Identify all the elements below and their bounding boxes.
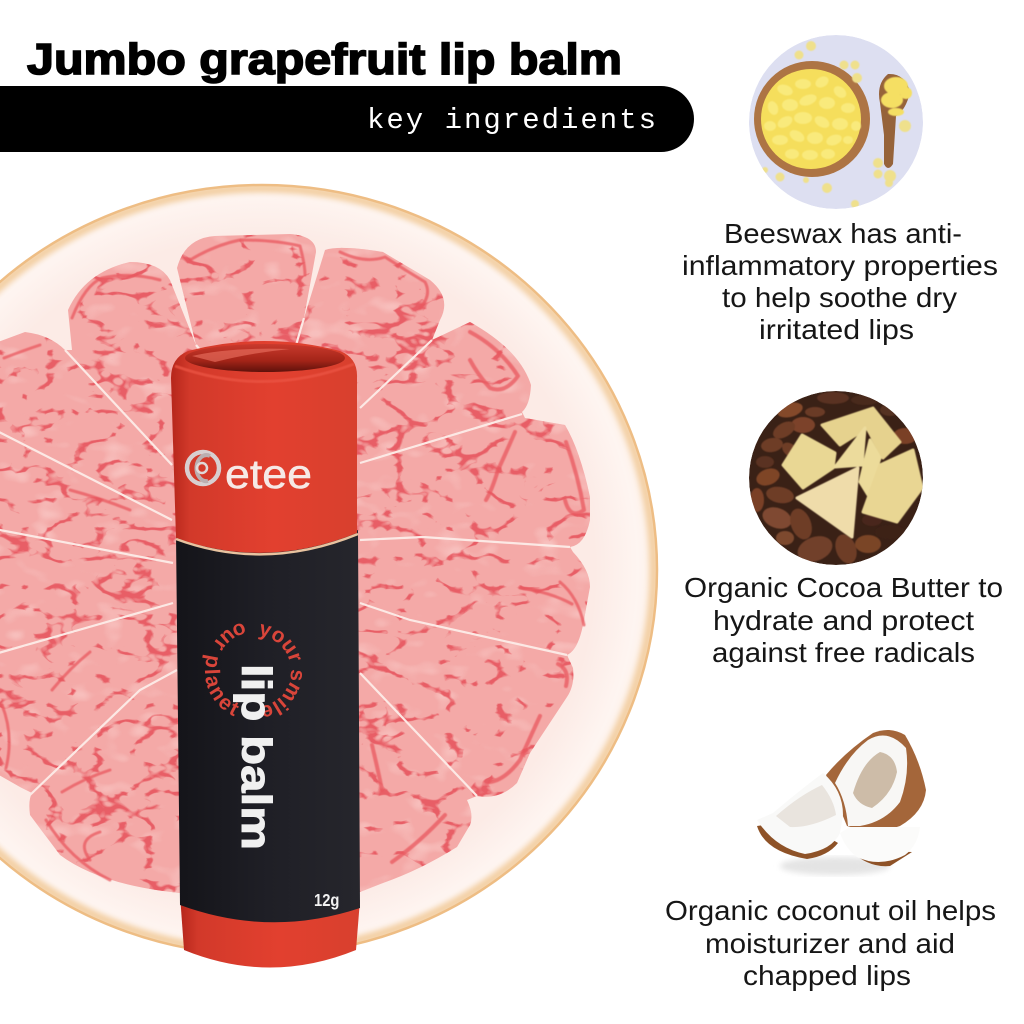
circular slogan bbox=[202, 624, 302, 717]
ingredient text: cocoa butter: against free radicals bbox=[712, 637, 975, 668]
logo mark bbox=[187, 452, 219, 484]
logo wordmark: etee bbox=[225, 451, 312, 497]
ingredient: coconut bbox=[757, 730, 926, 875]
ground shadow bbox=[780, 857, 890, 875]
left coconut wedge bbox=[757, 773, 843, 859]
our planet: our planet bbox=[202, 624, 245, 716]
bottom coconut piece bbox=[840, 827, 920, 866]
tube black body bbox=[176, 530, 360, 922]
wax flakes bbox=[761, 69, 861, 169]
grapefruit rind bbox=[0, 185, 657, 955]
ingredient text: beeswax: Beeswax has anti- bbox=[724, 218, 962, 249]
your smile: your smile bbox=[258, 624, 302, 717]
ingredient text: coconut: chapped lips bbox=[743, 960, 911, 991]
ingredient text: coconut: moisturizer and aid bbox=[705, 928, 955, 959]
red pulp vesicle streaks bbox=[2, 240, 584, 880]
wooden bowl bbox=[754, 61, 870, 177]
lid seam bbox=[176, 534, 358, 554]
right coconut half bbox=[826, 730, 926, 830]
ingredient text: beeswax: irritated lips bbox=[759, 314, 914, 345]
grapefruit pulp segments bbox=[0, 234, 590, 893]
weight: 12g bbox=[314, 891, 339, 910]
wooden spoon bbox=[879, 74, 910, 168]
segment membranes bbox=[0, 318, 570, 796]
black bar bbox=[0, 86, 694, 152]
subtitle banner bbox=[0, 86, 694, 152]
lip balm tube bbox=[171, 341, 360, 968]
cocoa beans bbox=[750, 392, 917, 567]
etee logo bbox=[187, 451, 312, 497]
spoon flakes bbox=[881, 77, 912, 116]
ingredient text: cocoa butter: hydrate and protect bbox=[713, 605, 974, 636]
tube opening bbox=[175, 344, 354, 382]
butter chunks bbox=[783, 408, 922, 537]
ingredient: beeswax bbox=[749, 35, 923, 209]
scattered flakes bbox=[762, 41, 911, 208]
ingredient text: cocoa butter bbox=[684, 572, 1003, 668]
ingredient text: cocoa butter: Organic Cocoa Butter to bbox=[684, 572, 1003, 603]
ingredient text: beeswax: inflammatory properties bbox=[682, 250, 998, 281]
title: Jumbo grapefruit lip balm bbox=[27, 35, 622, 84]
tube red lid bbox=[171, 341, 357, 553]
product name: lip balm bbox=[233, 664, 280, 850]
cocoa photo bbox=[749, 391, 923, 567]
ingredient text: beeswax: to help soothe dry bbox=[722, 282, 957, 313]
ingredient: cocoa butter bbox=[749, 391, 923, 567]
ingredient text: coconut bbox=[665, 895, 996, 991]
beeswax photo bbox=[749, 35, 923, 209]
tube bottom cap bbox=[180, 895, 360, 968]
subtitle text: key ingredients bbox=[367, 104, 656, 137]
ingredient text: beeswax bbox=[682, 218, 998, 345]
grapefruit slice bbox=[0, 185, 657, 955]
ingredient text: coconut: Organic coconut oil helps bbox=[665, 895, 996, 926]
